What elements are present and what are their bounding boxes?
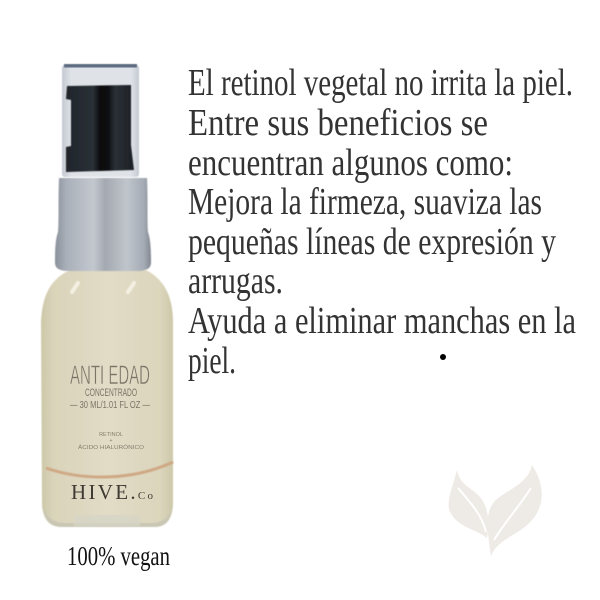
icon: leaves — [449, 465, 542, 556]
label: anti edad: ANTI EDAD — [70, 360, 150, 390]
collar highlight — [74, 233, 132, 239]
label: concentrado: CONCENTRADO — [85, 387, 137, 399]
label: brand: HIVE.Co — [71, 480, 154, 504]
main text block: Entre sus beneficios se — [188, 102, 488, 144]
label: acido hialuronico: ÁCIDO HIALURÓNICO — [78, 444, 145, 451]
bullet dot — [440, 354, 446, 360]
bottle collar — [55, 178, 151, 271]
main text block: arrugas. — [188, 260, 283, 302]
cap top edge — [64, 64, 137, 68]
main text block: piel. — [188, 340, 236, 382]
label: copper band — [46, 462, 173, 477]
label: volume: — 30 ML/1.01 FL OZ — — [70, 400, 150, 411]
black pump — [66, 85, 134, 172]
product: serum bottle — [41, 64, 173, 527]
bottle body — [41, 270, 173, 527]
label: plus: + — [110, 438, 113, 444]
clear cap — [62, 65, 139, 177]
label: retinol: RETINOL — [99, 432, 123, 438]
caption: 100% vegan: 100% vegan — [67, 541, 170, 571]
main text block: encuentran algunos como: — [188, 142, 513, 184]
main text block — [188, 62, 576, 382]
